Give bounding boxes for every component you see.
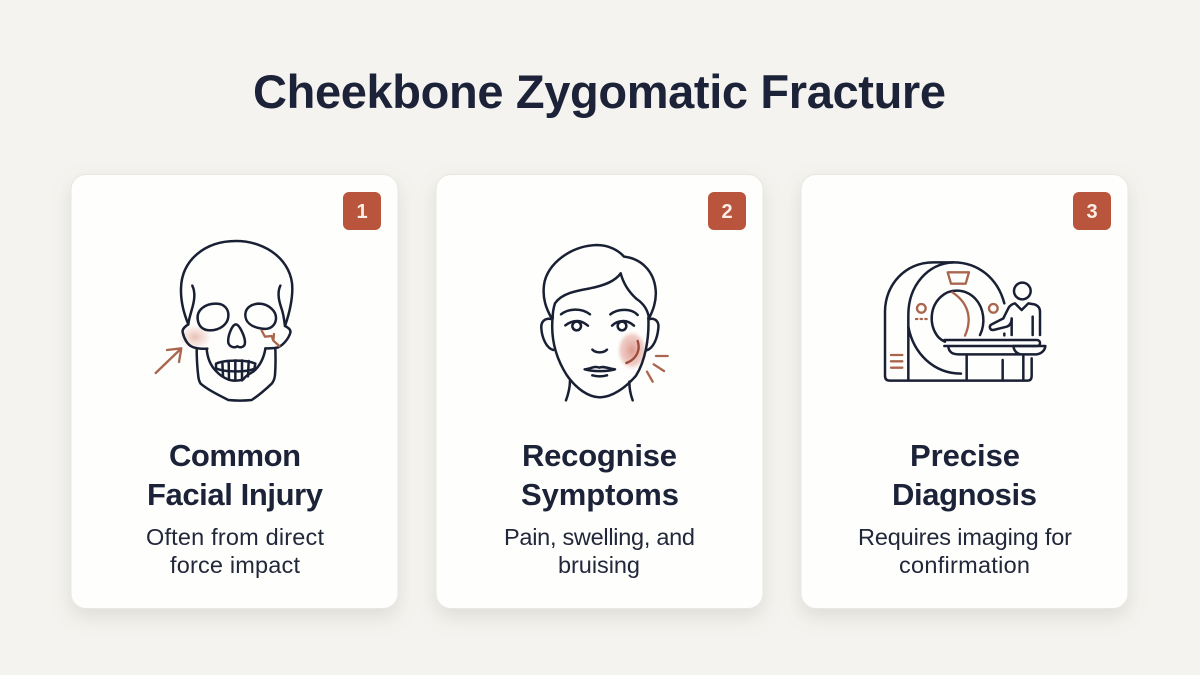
description: Often from direct	[146, 524, 324, 550]
card background	[801, 174, 1128, 608]
badge 2: 2	[721, 201, 733, 223]
badge 3: 3	[1086, 201, 1098, 223]
badge 1	[343, 192, 381, 230]
description	[504, 524, 695, 578]
description: Requires imaging for	[858, 524, 1072, 550]
description: force impact	[170, 552, 300, 578]
panel: recognise symptoms	[436, 174, 763, 608]
heading	[147, 438, 324, 512]
description	[146, 524, 324, 578]
heading: Common	[169, 438, 301, 473]
icon: CT scanner with operator	[885, 262, 1045, 381]
heading: Symptoms	[521, 477, 679, 512]
description	[858, 524, 1072, 578]
badge 1: 1	[356, 201, 368, 223]
card background	[71, 174, 398, 608]
description: confirmation	[899, 552, 1030, 578]
heading: Recognise	[522, 438, 677, 473]
heading: Diagnosis	[892, 477, 1037, 512]
badge 2	[708, 192, 746, 230]
description: bruising	[558, 552, 640, 578]
badge 3	[1073, 192, 1111, 230]
heading: Precise	[910, 438, 1020, 473]
panel: common facial injury	[71, 174, 398, 608]
description: Pain, swelling, and	[504, 524, 695, 550]
title: Cheekbone Zygomatic Fracture	[253, 65, 946, 118]
heading	[521, 438, 679, 512]
heading	[892, 438, 1037, 512]
icon: face with bruised cheek	[541, 245, 668, 400]
icon: skull with fracture and impact arrow	[156, 241, 292, 400]
panel: precise diagnosis	[801, 174, 1128, 608]
heading: Facial Injury	[147, 477, 324, 512]
card background	[436, 174, 763, 608]
